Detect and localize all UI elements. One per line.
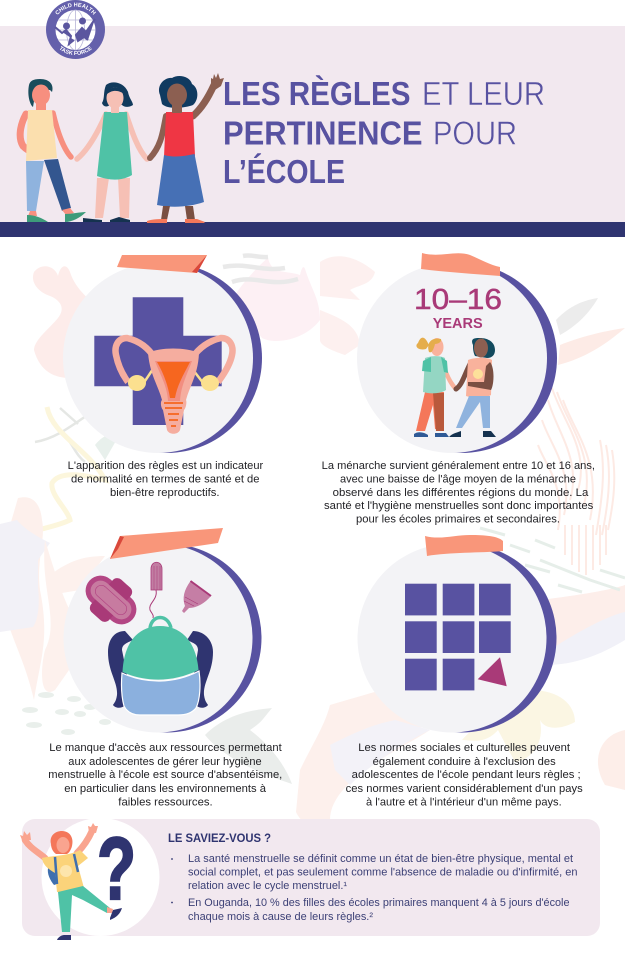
text: menarche: La ménarche survient généralement entre 10 et 16 ans, — [322, 460, 595, 472]
icon: triangle — [478, 657, 507, 686]
heading: LE SAVIEZ-VOUS ? — [168, 833, 271, 845]
text: menarche: observé dans les différentes régions du monde. La — [333, 487, 588, 499]
icon: tampon — [150, 562, 162, 618]
icon: menstrual cup — [182, 581, 211, 613]
tape — [425, 535, 503, 556]
girl 2 — [77, 82, 147, 222]
text: apparition: bien-être reproductifs. — [110, 487, 220, 499]
text: social norms: adolescentes de l'école pendant leurs règles ; — [352, 769, 581, 781]
illustration: child jumping — [20, 823, 122, 940]
text: menarche — [322, 460, 595, 526]
panel: backpack and menstrual products — [64, 528, 262, 732]
tape — [117, 255, 207, 273]
tape — [110, 528, 223, 559]
background botanical shapes — [0, 255, 625, 825]
text: social norms: Les normes sociales et culturelles peuvent — [358, 742, 570, 754]
icon: uterus — [115, 338, 233, 434]
icon: backpack — [108, 618, 213, 715]
text: access to resources — [48, 742, 282, 808]
age number: 10–16 — [414, 284, 502, 316]
bullet list: relation avec le cycle menstruel.¹ — [188, 880, 347, 892]
bullet list — [171, 853, 578, 923]
years label: YEARS — [433, 315, 483, 332]
title: POUR — [433, 116, 517, 152]
panel: medical cross — [63, 255, 262, 453]
illustration: three girls holding hands — [20, 73, 224, 223]
text: access to resources: Le manque d'accès aux ressources permettant — [49, 742, 282, 754]
text: social norms: à l'autre et à l'intérieur d'un même pays. — [366, 796, 562, 808]
text: access to resources: menstruelle à l'école est source d'absentéisme, — [48, 769, 282, 781]
text: menarche: pour les écoles primaires et secondaires. — [356, 514, 560, 526]
panel: social norms — [358, 535, 556, 732]
text: apparition — [68, 460, 264, 499]
title: PERTINENCE — [223, 116, 422, 152]
logo: Child Health Task Force: CHILD HEALTH — [56, 2, 96, 15]
tape — [421, 253, 500, 276]
text: social norms: également conduire à l'exclusion des — [373, 756, 556, 768]
icon: grid of squares — [405, 584, 511, 690]
text: apparition: de normalité en termes de santé et de — [71, 474, 260, 486]
panel: le saviez-vous — [20, 818, 600, 940]
bullet list: En Ouganda, 10 % des filles des écoles primaires manquent 4 à 5 jours d'école — [188, 897, 570, 909]
panel: 10-16 years — [357, 253, 557, 453]
icon: question mark: ? — [97, 819, 136, 918]
text: social norms: ces normes varient considérablement d'un pays — [346, 783, 583, 795]
text: menarche: santé et l'hygiène menstruelles sont donc importantes — [324, 500, 594, 512]
text: access to resources: faibles ressources. — [118, 796, 213, 808]
text: social norms — [346, 742, 583, 808]
logo: Child Health Task Force — [46, 0, 105, 59]
icon: cross — [94, 297, 222, 425]
text: access to resources: en particulier dans les environnements à — [64, 783, 266, 795]
title: LES RÈGLES — [223, 75, 410, 113]
girl 1 — [20, 79, 86, 222]
text: menarche: avec une baisse de l'âge moyen de la ménarche — [340, 474, 576, 486]
bullet list: social complet, et pas seulement comme l'absence de maladie ou d'infirmité, en — [188, 866, 578, 878]
text: apparition: L'apparition des règles est un indicateur — [68, 460, 264, 472]
logo: Child Health Task Force: TASK FORCE — [60, 46, 92, 55]
title: ET LEUR — [422, 76, 545, 113]
illustration: two girls — [414, 338, 496, 437]
bullet list: La santé menstruelle se définit comme un état de bien-être physique, mental et — [188, 853, 573, 865]
girl 3 — [147, 73, 224, 223]
text: access to resources: aux adolescentes de gérer leur hygiène — [68, 756, 262, 768]
icon: pad — [75, 564, 147, 636]
bullet list: chaque mois à cause de leurs règles.² — [188, 911, 373, 923]
title: L’ÉCOLE — [223, 153, 345, 191]
title — [223, 75, 545, 191]
header band — [0, 26, 625, 237]
